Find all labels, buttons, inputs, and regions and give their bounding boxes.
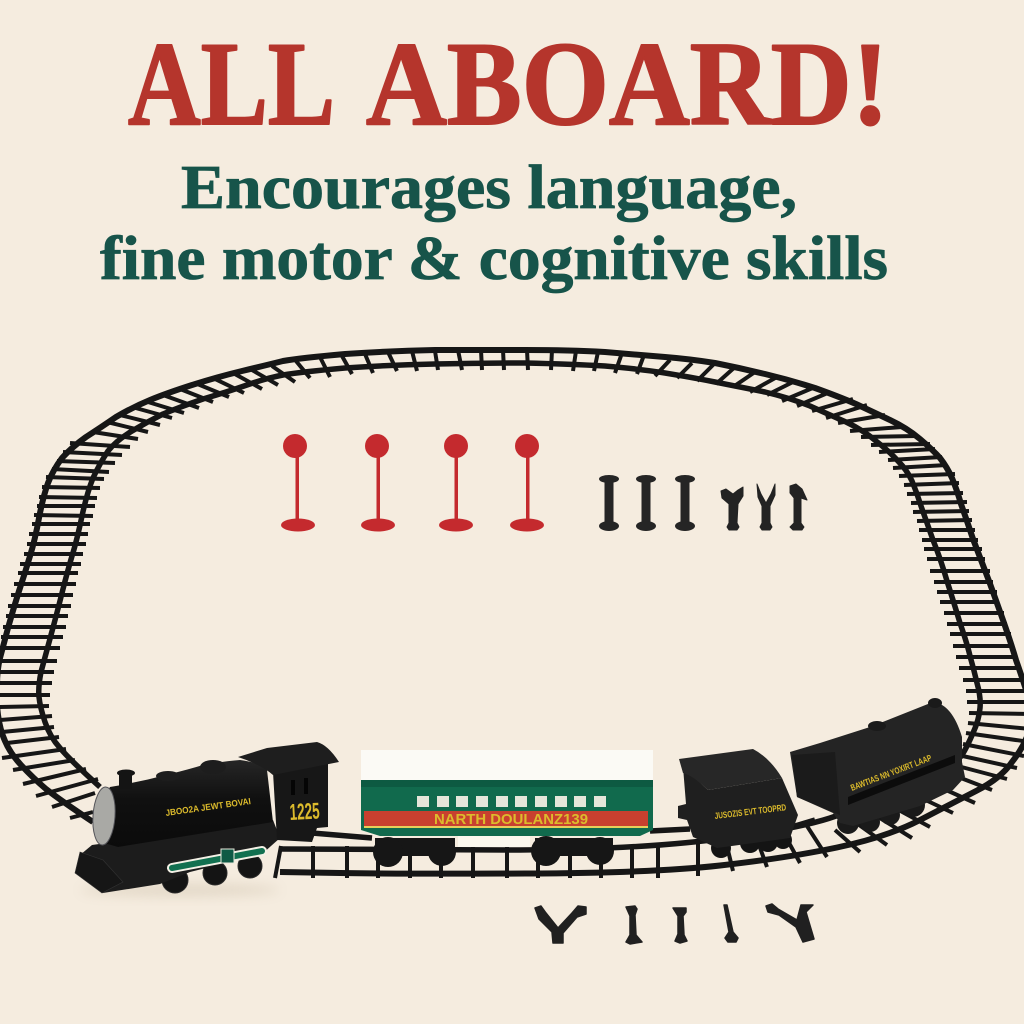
loco green plate (172, 849, 262, 868)
black track spools (599, 475, 695, 531)
car windows (417, 796, 606, 807)
title (128, 17, 889, 150)
train shadow (80, 884, 280, 896)
title: ALL (128, 17, 335, 150)
tanker dome (868, 698, 942, 731)
loco cab roof (238, 742, 339, 775)
tanker wheels (837, 793, 925, 834)
coal tender body (678, 767, 798, 848)
loco lettering: JBOO2A JEWT BOVAI (165, 796, 251, 818)
black clip pieces (721, 484, 807, 530)
car lettering: NARTH DOULANZ139 (434, 811, 588, 828)
subtitle (100, 154, 888, 293)
loco boiler (99, 760, 273, 847)
rear tanker car (790, 698, 965, 834)
loco headlight (91, 786, 117, 846)
train track loop (0, 350, 1024, 878)
tanker body (790, 702, 965, 826)
coal tender wheels (711, 831, 792, 858)
coal tender top (679, 749, 782, 790)
car white roof (361, 750, 653, 780)
loco cowcatcher (75, 852, 123, 893)
loco frame (80, 820, 280, 893)
title: ABOARD! (366, 17, 889, 150)
tanker end face (792, 752, 840, 815)
coupler rods (312, 820, 815, 838)
coal tender lettering: JUSOZIS EVT TOOPRD (714, 802, 787, 821)
loco number: 1225 (289, 797, 320, 825)
subtitle: fine motor & cognitive skills (100, 225, 888, 293)
car bogies (373, 835, 614, 867)
red signal posts (281, 434, 544, 532)
tanker lettering: BAWTIAS NN YOXIRT LAAP (849, 753, 933, 793)
car green body (361, 780, 653, 836)
car red band (364, 811, 648, 826)
tanker dark strip (848, 755, 955, 805)
loco cab (273, 763, 328, 842)
locomotive (75, 742, 339, 893)
loco chimney (117, 770, 135, 789)
loco domes (156, 760, 226, 781)
subtitle: Encourages language, (181, 154, 797, 222)
loco wheels (162, 854, 262, 893)
coal tender (678, 749, 798, 858)
passenger car (361, 750, 653, 867)
loco cab slits (291, 778, 308, 795)
car yellow stripe (364, 826, 648, 828)
loose parts row (535, 904, 814, 944)
